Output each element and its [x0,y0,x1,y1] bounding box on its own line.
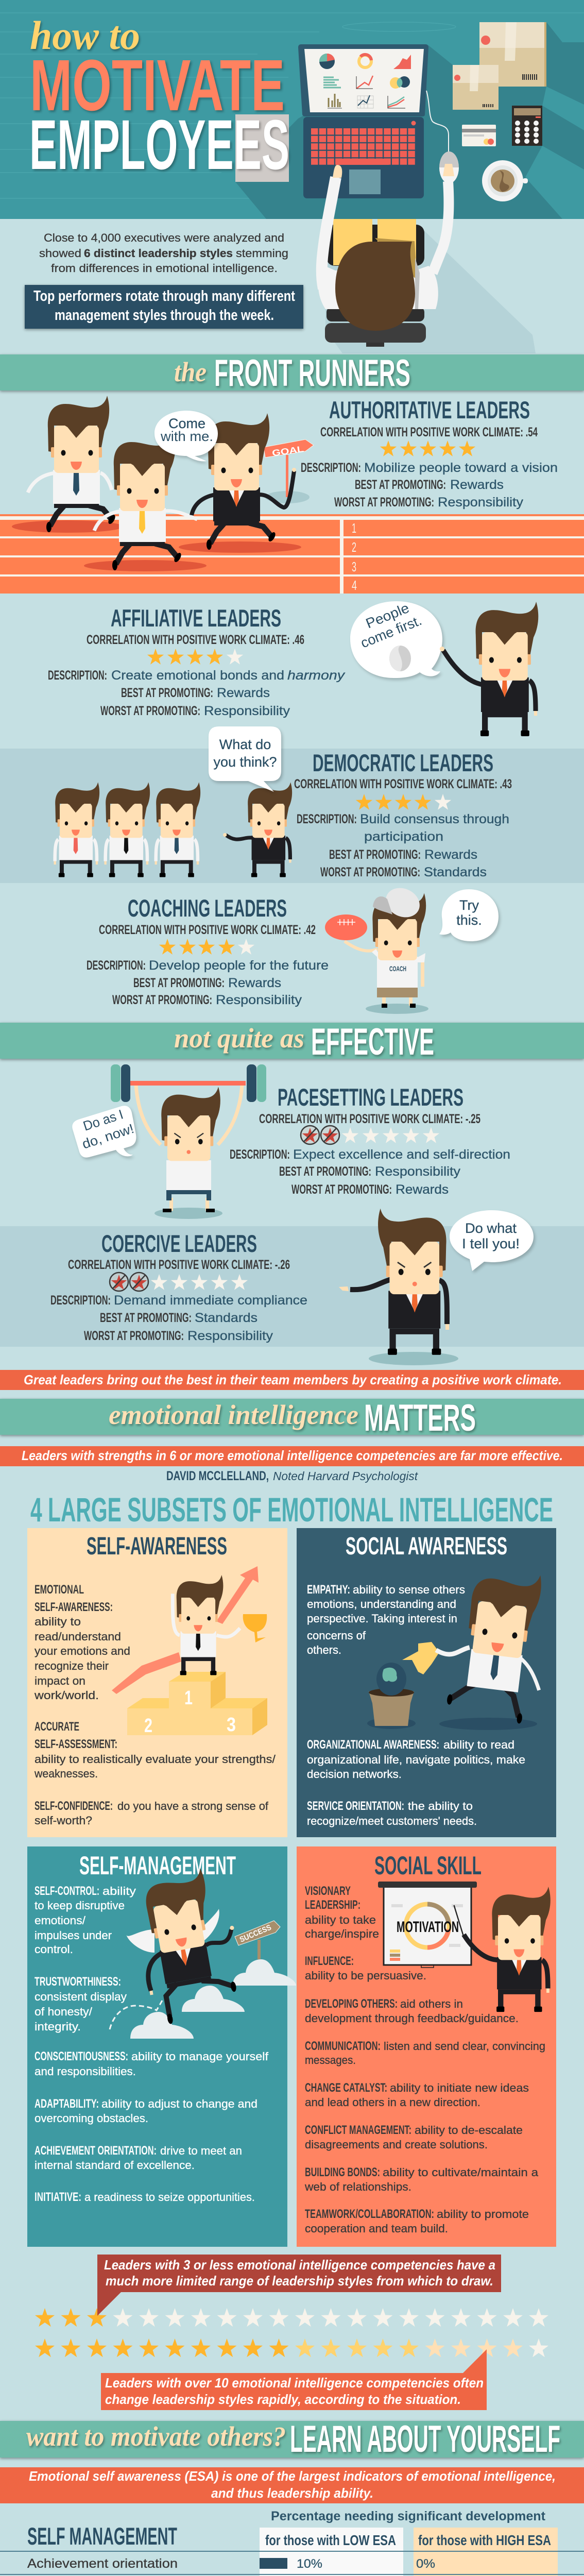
text: competencies: web of relationships. [304,2180,411,2193]
speech bubble: do as I do, now [72,1106,136,1158]
text: competencies: ability to initiate new ideas [390,2081,529,2094]
panel: affiliative leaders [48,604,346,718]
title: how to [30,13,140,58]
panel: self-management [27,1846,296,2247]
callout: emotional self awareness: and thus leadership ability. [211,2485,373,2501]
callout: over 10 competencies [101,2349,487,2410]
details: Mobilize people toward a vision [364,461,558,475]
panel: coercive leaders [50,1230,307,1343]
details: Responsibility [375,1164,461,1179]
intro text: Close to 4,000 executives were analyzed and [44,231,284,244]
chart title: Percentage needing significant development [271,2509,546,2523]
illustration: presenter with motivation chart [378,1882,551,2012]
details: Rewards [396,1182,449,1197]
details [230,1147,510,1197]
speech bubble: try this: this. [456,912,482,928]
details: Responsibility [187,1329,273,1343]
text: competencies: COMMUNICATION: [305,2039,381,2053]
star rating [301,1126,439,1144]
text: competencies: ability to read [443,1738,514,1751]
text: competencies: ACHIEVEMENT ORIENTATION: [35,2144,157,2158]
icon: goal sign [264,439,314,503]
text: competencies: consistent display [35,1990,127,2003]
running track: 2 [352,539,356,555]
character: runner in white shirt with navy tie [28,396,116,532]
text: competencies [307,1583,525,1827]
character: weightlifter [111,1064,266,1219]
callout: top performers: Top performers rotate through many different [33,288,295,304]
callout: emotional self awareness: Emotional self awareness (ESA) is one of the largest indicators of emotional intelligence, [29,2468,556,2484]
details: DESCRIPTION: [297,812,357,826]
text: competencies: messages. [305,2054,356,2066]
coffee cup [482,160,528,201]
text: competencies: integrity. [35,2020,81,2033]
callout: over 10 competencies: Leaders with over 10 emotional intelligence competencies often [105,2375,484,2391]
text: competencies: ability to promote [437,2208,529,2221]
text: competencies: SELF-ASSESSMENT: [35,1737,117,1751]
speech bubble: do what I tell you: Do what [465,1221,517,1236]
text: competencies: concerns of [307,1629,366,1642]
details: Demand immediate compliance [114,1293,307,1308]
running track: 4 [352,578,357,593]
group: self management [27,2522,438,2576]
heading: COACHING LEADERS [128,894,287,922]
details: DESCRIPTION: [230,1147,290,1162]
panel: democratic leaders [294,749,512,879]
credit card [462,125,496,146]
correlation: CORRELATION WITH POSITIVE WORK CLIMATE: -.25 [259,1112,480,1126]
panel: coaching leaders [87,894,329,1007]
section banner: the front runners [0,352,584,394]
character: democratic leader [223,782,292,877]
star row: over 10 competencies [35,2338,548,2357]
details [87,958,329,1007]
text: competencies: ability to sense others [353,1583,465,1596]
callout: 3 or less competencies: much more limited range of leadership styles from which to draw. [106,2273,493,2289]
callout: 3 or less competencies: Leaders with 3 or less emotional intelligence competencies have a [104,2257,495,2273]
text: competencies: ability to [35,1615,81,1628]
star rating [159,939,254,955]
text: competencies [304,1884,545,2235]
callout: top performers: management styles through the week. [55,307,274,324]
attribution: DAVID MCCLELLAND, [166,1469,269,1483]
laptop [298,44,428,198]
text: competencies: organizational life, navigate politics, make [307,1753,525,1766]
details: Responsibility [204,704,290,718]
text: competencies: ability to take [305,1913,376,1926]
text: competencies: LEADERSHIP: [305,1898,360,1912]
text: competencies: ADAPTABILITY: [35,2097,99,2111]
star rating [380,440,475,456]
illustration: man on podium [112,1566,267,1737]
text: competencies: work/world. [34,1689,99,1702]
text: competencies: to keep disruptive [35,1899,125,1912]
details: DESCRIPTION: [301,461,361,475]
speech bubble: try this: Try [459,897,479,913]
speech bubble: people come first: come first. [358,613,424,651]
details: WORST AT PROMOTING: [84,1329,184,1343]
details [301,461,558,510]
details: harmony [287,668,346,683]
text: competencies: charge/inspire [305,1927,379,1940]
text: competencies: BUILDING BONDS: [305,2165,380,2179]
text: competencies: SELF-CONFIDENCE: [35,1799,113,1813]
boxes [453,22,546,110]
title: EMPLOYEES [29,106,289,184]
text: competencies: EMOTIONAL [35,1583,84,1597]
details: Create emotional bonds and [111,668,284,683]
text: competencies: listen and send clear, convincing [384,2040,545,2053]
long shadow [235,22,584,219]
speech bubble: come with me [154,411,218,461]
intro text: stemming [236,247,288,260]
character: team member black tie [104,782,150,877]
group: self management: SELF MANAGEMENT [27,2522,177,2550]
text: competencies: SELF-CONTROL: [35,1884,99,1898]
text: competencies: ability to cultivate/maintain a [383,2166,539,2179]
speech bubble: people come first [350,600,442,678]
details: BEST AT PROMOTING: [355,478,446,492]
text: competencies: perspective. Taking interest in [307,1612,457,1625]
details [297,812,509,879]
column headers: for those with HIGH ESA [418,2532,551,2548]
text: competencies: cooperation and team build. [305,2222,448,2235]
text: competencies: emotions/ [35,1914,86,1927]
illustration: man on podium: 2 [144,1715,152,1737]
intro text: showed [39,247,81,260]
text: competencies: ability to be persuasive. [305,1969,426,1982]
illustration: man leaping clouds [110,1864,296,2039]
speech bubble: do what I tell you: I tell you! [462,1236,520,1251]
section banner: not quite as effective: not quite as [174,1023,304,1054]
speech bubble: do what I tell you [450,1210,534,1271]
running track: 1 [352,520,356,536]
text: competencies: VISIONARY [305,1884,351,1898]
character: coach with football: COACH [389,964,406,973]
group: self management: Achievement orientation [27,2556,178,2571]
panel: social awareness [297,1528,556,1837]
callout: 3 or less competencies [97,2255,501,2316]
running track [0,514,584,594]
details: WORST AT PROMOTING: [334,495,434,510]
star rating [356,794,451,810]
section banner: emotional intelligence matters: MATTERS [364,1397,476,1439]
text: competencies: and responsibilities. [35,2065,136,2078]
attribution [166,1469,419,1483]
text: competencies: development through feedback/guidance. [305,2012,519,2025]
text: competencies: recognize/meet customers' needs. [307,1815,477,1827]
details: BEST AT PROMOTING: [121,686,213,700]
correlation: CORRELATION WITH POSITIVE WORK CLIMATE: .46 [87,633,304,647]
callout: emotional self awareness [0,2467,584,2503]
text: competencies: recognize their [35,1659,109,1672]
text: competencies: aid others in [400,1997,463,2010]
details: WORST AT PROMOTING: [320,865,420,879]
text: competencies: weaknesses. [34,1767,98,1780]
heading: SOCIAL SKILL [374,1851,482,1880]
details: Rewards [217,686,270,700]
text: competencies: emotions, understanding and [307,1598,456,1611]
heading: AFFILIATIVE LEADERS [111,604,281,632]
intro text: 6 distinct leadership styles [84,247,233,260]
text: competencies: others. [307,1643,341,1656]
panel: democratic leaders band [0,749,584,883]
character: affiliative leader [440,602,538,736]
text: competencies: decision networks. [307,1768,402,1781]
details: Develop people for the future [149,958,329,973]
attribution: Noted Harvard Psychologist [273,1469,419,1483]
text: competencies: ACCURATE [35,1720,79,1734]
text: competencies: SERVICE ORIENTATION: [307,1799,404,1813]
text: competencies: ability [102,1885,136,1897]
callout: top performers [25,285,303,329]
details: WORST AT PROMOTING: [112,993,212,1007]
details: Rewards [228,976,281,990]
intro text [39,231,288,275]
text: competencies: drive to meet an [160,2144,242,2157]
speech bubble: do as I do, now: do, now! [80,1121,136,1152]
illustration: man leaping clouds: SUCCESS [238,1923,272,1944]
text: competencies: INFLUENCE: [305,1954,354,1968]
text: competencies: do you have a strong sense of [117,1800,269,1812]
text: competencies: ability to realistically evaluate your strengths/ [35,1753,276,1766]
character: coach with football [325,883,428,1014]
speech bubble: what do you think: What do [219,737,271,752]
speech bubble: come with me: Come [168,416,205,431]
details: WORST AT PROMOTING: [100,704,200,718]
panel: coercive leaders band [0,1226,584,1347]
character: team member navy tie [154,782,200,877]
star rating [110,1273,248,1291]
section banner: emotional intelligence matters: emotional intelligence [109,1399,358,1430]
text: competencies: ability to adjust to change and [101,2097,257,2110]
character: runner in white shirt with yellow tie [94,434,197,570]
panel: pacesetting leaders [230,1083,510,1197]
text: competencies: your emotions and [35,1645,130,1657]
section banner: not quite as effective: EFFECTIVE [311,1021,434,1063]
text: competencies: read/understand [35,1630,121,1643]
text: competencies: overcoming obstacles. [35,2112,148,2125]
mouse and cord [426,91,459,183]
text: competencies: EMPATHY: [307,1583,350,1597]
details: BEST AT PROMOTING: [279,1164,371,1179]
text: competencies: disagreements and create solutions. [305,2138,488,2151]
details: BEST AT PROMOTING: [100,1311,192,1325]
text: competencies: SELF-AWARENESS: [35,1600,113,1614]
star rating [147,649,243,665]
text: competencies: and lead others in a new direction. [305,2096,480,2109]
details: Responsibility [216,993,302,1007]
icon: goal sign: GOAL [271,444,304,458]
speech bubble: do as I do, now: Do as I [81,1106,125,1134]
chart: percentage needing significant development [0,2509,584,2576]
details: participation [364,829,443,844]
character: lead runner in suit [192,413,296,550]
details: Rewards [450,478,504,492]
illustration: man on podium: 1 [184,1687,193,1709]
details: WORST AT PROMOTING: [291,1182,392,1197]
text: competencies: internal standard of excellence. [35,2159,195,2172]
intro text: from differences in emotional intelligence. [51,262,278,275]
text: competencies: of honesty/ [35,2005,93,2018]
speech bubble: come with me: with me. [160,429,213,444]
text: competencies: CHANGE CATALYST: [305,2081,387,2095]
section banner: emotional intelligence matters [0,1397,584,1439]
character: coercive leader [339,1209,458,1365]
details: Responsibility [438,495,524,510]
group: self management: 0% [416,2557,435,2571]
panel: self-awareness [27,1528,287,1837]
callout: over 10 competencies: change leadership styles rapidly, according to the situation. [105,2392,461,2407]
heading: SELF-MANAGEMENT [79,1851,236,1880]
illustration: presenter with motivation chart: MOTIVATION [397,1919,459,1936]
text: competencies: ability to manage yourself [131,2050,269,2063]
text: competencies: ability to de-escalate [415,2124,523,2137]
details: Expect excellence and self-direction [293,1147,510,1162]
details: Standards [424,865,487,879]
details: DESCRIPTION: [50,1293,111,1308]
text: competencies: ORGANIZATIONAL AWARENESS: [307,1738,439,1752]
column headers: for those with LOW ESA [265,2532,396,2548]
heading: COERCIVE LEADERS [101,1230,257,1257]
section banner: the front runners: FRONT RUNNERS [214,352,410,394]
text: competencies: CONSCIENTIOUSNESS: [35,2049,128,2063]
title [29,13,289,184]
text: competencies: control. [35,1943,73,1956]
text: competencies: self-worth? [35,1814,92,1827]
correlation: CORRELATION WITH POSITIVE WORK CLIMATE: -.26 [68,1258,290,1272]
details [50,1293,307,1343]
office worker top view [318,164,536,353]
text: competencies: INITIATIVE: [35,2190,81,2204]
details: BEST AT PROMOTING: [133,976,225,990]
correlation: CORRELATION WITH POSITIVE WORK CLIMATE: .42 [99,923,316,937]
details: BEST AT PROMOTING: [329,848,421,862]
panel: authoritative leaders [301,396,558,510]
illustration: man on podium: 3 [227,1714,236,1736]
star row: 3 competencies [35,2308,548,2327]
speech bubble: try this [439,889,499,941]
details: DESCRIPTION: [87,958,146,973]
details: Build consensus through [360,812,509,826]
section banner: the front runners: the [174,357,207,387]
text: competencies: TEAMWORK/COLLABORATION: [305,2207,434,2221]
speech bubble: what do you think [209,726,281,792]
illustration: man watering globe [367,1564,553,1730]
speech bubble: what do you think: you think? [213,754,277,770]
speech bubble: people come first: People [364,600,411,632]
text: competencies: the ability to [408,1800,473,1812]
heading: SELF-AWARENESS [87,1533,227,1560]
calculator [512,106,542,146]
text: competencies: impulses under [35,1929,112,1942]
text: competencies: impact on [35,1674,85,1687]
group: self management: 10% [297,2557,322,2571]
text: competencies: CONFLICT MANAGEMENT: [305,2123,411,2137]
section banner: learn about yourself [0,2418,584,2460]
text: competencies [34,1583,276,1827]
header: desk scene [0,0,584,219]
text: competencies: DEVELOPING OTHERS: [305,1997,398,2011]
text: competencies: a readiness to seize opportunities. [84,2191,255,2204]
column headers [265,2532,551,2548]
details [48,668,346,718]
title: MOTIVATE [30,44,285,126]
text: competencies [35,1884,269,2204]
section banner: learn about yourself: want to motivate others? [26,2421,286,2452]
details: Standards [195,1311,257,1325]
running track: 3 [352,559,356,574]
section banner: not quite as effective [0,1021,584,1063]
text: competencies: TRUSTWORTHINESS: [35,1975,121,1989]
panel: social skill [297,1846,556,2247]
details: Rewards [424,848,477,862]
heading: PACESETTING LEADERS [278,1083,463,1111]
character: team member red tie [54,782,99,877]
details: DESCRIPTION: [48,668,107,683]
